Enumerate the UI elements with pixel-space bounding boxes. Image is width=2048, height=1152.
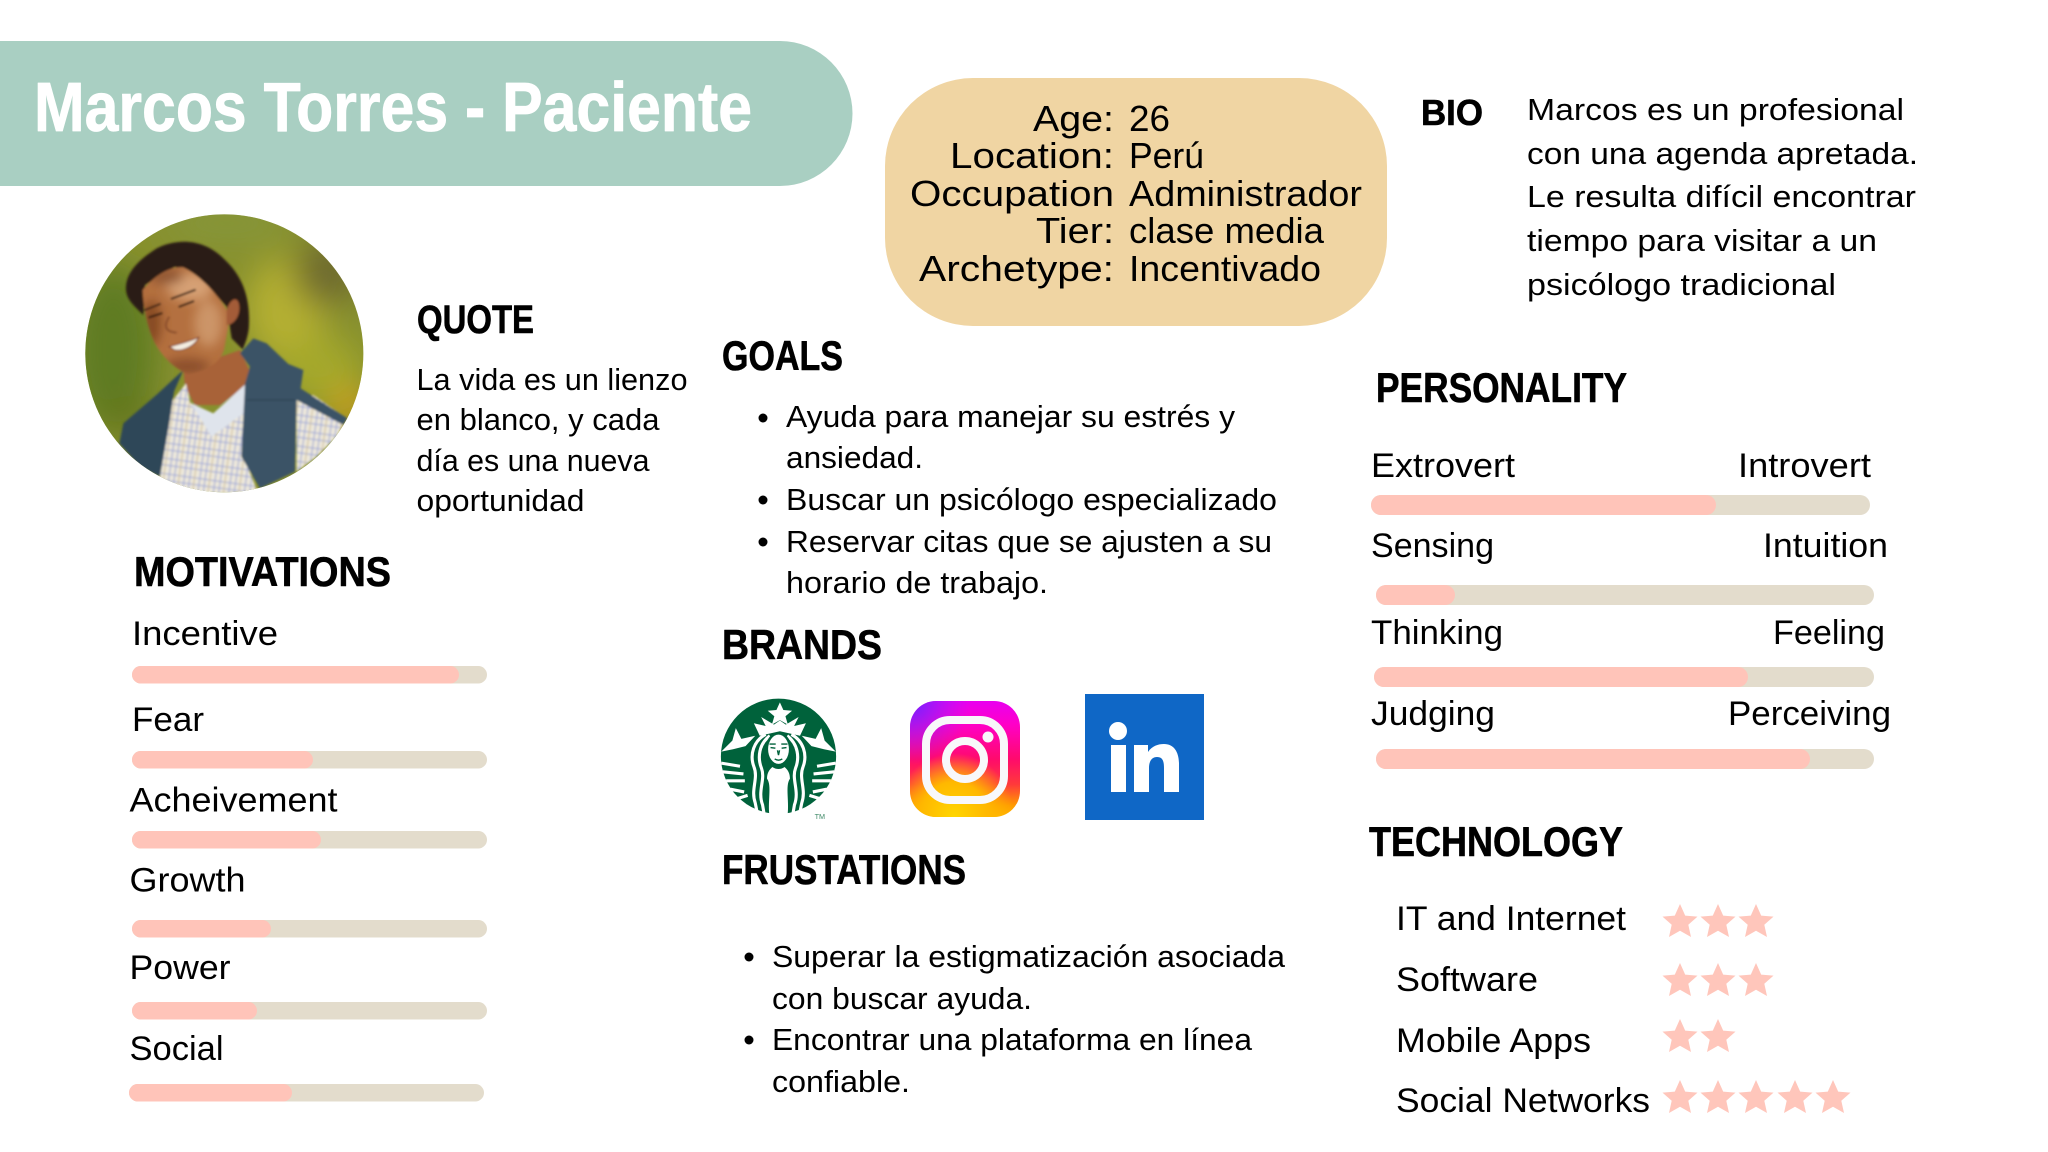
age row: Age: <box>1033 98 1114 139</box>
rating: software <box>1396 961 1774 999</box>
panel: quote <box>416 298 688 518</box>
goals list <box>758 399 1277 600</box>
title text: Marcos Torres - Paciente <box>34 68 752 146</box>
bio text: tiempo para visitar a un <box>1527 223 1877 258</box>
bio text: Le resulta difícil encontrar <box>1527 179 1916 214</box>
scale: extrovert to introvert <box>1371 447 1872 515</box>
rating: mobile apps: Mobile Apps <box>1396 1022 1591 1060</box>
neck <box>183 350 251 405</box>
icon: instagram logo <box>910 701 1020 817</box>
scale: sensing to intuition: Intuition <box>1763 527 1888 565</box>
nose <box>166 317 177 333</box>
panel: goals <box>722 332 1277 600</box>
age row: 26 <box>1129 98 1170 139</box>
goals heading: GOALS <box>722 332 843 379</box>
scale: extrovert to introvert: Extrovert <box>1371 447 1516 485</box>
quote text: día es una nueva <box>416 443 650 478</box>
bio text <box>1527 92 1918 302</box>
panel: personality <box>1371 364 1891 769</box>
frustrations list: Superar la estigmatización asociada <box>772 939 1286 974</box>
goals list: Reservar citas que se ajusten a su <box>786 524 1272 559</box>
bar: social <box>129 1030 484 1102</box>
quote text: La vida es un lienzo <box>416 362 688 397</box>
rating: social networks <box>1396 1080 1850 1120</box>
goals list: Ayuda para manejar su estrés y <box>786 399 1236 434</box>
tier row <box>1036 210 1325 251</box>
age row <box>1033 98 1170 139</box>
rating: mobile apps <box>1396 1019 1736 1060</box>
eyes and brows <box>145 290 195 310</box>
bio text: Marcos es un profesional <box>1527 92 1904 127</box>
panel: technology <box>1369 818 1850 1120</box>
rating: it and internet <box>1396 900 1774 938</box>
frustrations list: confiable. <box>772 1064 910 1099</box>
sweater <box>119 370 183 477</box>
panel: motivations <box>129 548 487 1102</box>
scale: judging to perceiving: Judging <box>1371 695 1495 733</box>
portrait photo <box>85 214 364 492</box>
face <box>143 267 228 374</box>
technology heading: TECHNOLOGY <box>1369 818 1623 865</box>
bar: achievement: Acheivement <box>130 782 338 820</box>
quote text <box>416 362 688 518</box>
bar: growth <box>130 862 487 938</box>
rating: software: Software <box>1396 961 1538 999</box>
frustrations list: Encontrar una plataforma en línea <box>772 1022 1253 1057</box>
bar: social: Social <box>130 1030 224 1068</box>
location row <box>950 135 1204 176</box>
panel: bio <box>1421 92 1918 302</box>
scale: sensing to intuition: Sensing <box>1371 527 1494 565</box>
scale: sensing to intuition <box>1371 527 1888 605</box>
goals list: horario de trabajo. <box>786 565 1048 600</box>
tier row: Tier: <box>1036 210 1114 251</box>
goals list: ansiedad. <box>786 440 923 475</box>
archetype row: Incentivado <box>1129 248 1321 289</box>
mouth <box>169 337 199 350</box>
bar: fear <box>132 701 487 768</box>
personality heading: PERSONALITY <box>1376 364 1627 411</box>
scale: extrovert to introvert: Introvert <box>1738 447 1872 485</box>
location row: Location: <box>950 135 1114 176</box>
scale: thinking to feeling: Thinking <box>1371 614 1503 652</box>
frustrations list: con buscar ayuda. <box>772 981 1032 1016</box>
bar: fear: Fear <box>132 701 204 739</box>
motivations heading: MOTIVATIONS <box>134 548 391 595</box>
brands heading: BRANDS <box>722 621 882 668</box>
panel: age and profile card <box>885 78 1387 326</box>
bio text: con una agenda apretada. <box>1527 136 1918 171</box>
bio heading: BIO <box>1421 92 1483 133</box>
frustrations list <box>744 939 1286 1099</box>
occupation row <box>910 173 1362 214</box>
bar: incentive <box>132 615 487 684</box>
scale: judging to perceiving: Perceiving <box>1728 695 1891 733</box>
bar: incentive: Incentive <box>132 615 278 653</box>
quote text: oportunidad <box>416 483 584 518</box>
bar: power <box>130 949 487 1020</box>
occupation row: Administrador <box>1129 173 1362 214</box>
bio text: psicólogo tradicional <box>1527 267 1836 302</box>
icon: linkedin logo <box>1085 694 1204 820</box>
rating: it and internet: IT and Internet <box>1396 900 1627 938</box>
rating: social networks: Social Networks <box>1396 1082 1650 1120</box>
bar: power: Power <box>130 949 230 987</box>
panel: frustrations <box>722 846 1286 1099</box>
scale: thinking to feeling <box>1371 614 1885 687</box>
scale: thinking to feeling: Feeling <box>1773 614 1885 652</box>
frustrations heading: FRUSTATIONS <box>722 846 966 893</box>
hair back <box>126 242 249 349</box>
tier row: clase media <box>1129 210 1325 251</box>
trademark: TM <box>815 812 825 821</box>
location row: Perú <box>1129 135 1204 176</box>
scale: judging to perceiving <box>1371 695 1891 769</box>
archetype row: Archetype: <box>919 248 1114 289</box>
panel: brands <box>721 621 1204 821</box>
plaid shirt <box>160 383 258 493</box>
occupation row: Occupation <box>910 173 1114 214</box>
ear <box>227 299 239 325</box>
t-shirt <box>190 384 247 438</box>
quote text: en blanco, y cada <box>416 402 660 437</box>
title banner <box>0 41 852 186</box>
quote heading: QUOTE <box>417 298 534 342</box>
icon: starbucks logo <box>721 699 836 821</box>
goals list: Buscar un psicólogo especializado <box>786 482 1277 517</box>
archetype row <box>919 248 1321 289</box>
bar: achievement <box>130 782 487 848</box>
bar: growth: Growth <box>130 862 246 900</box>
